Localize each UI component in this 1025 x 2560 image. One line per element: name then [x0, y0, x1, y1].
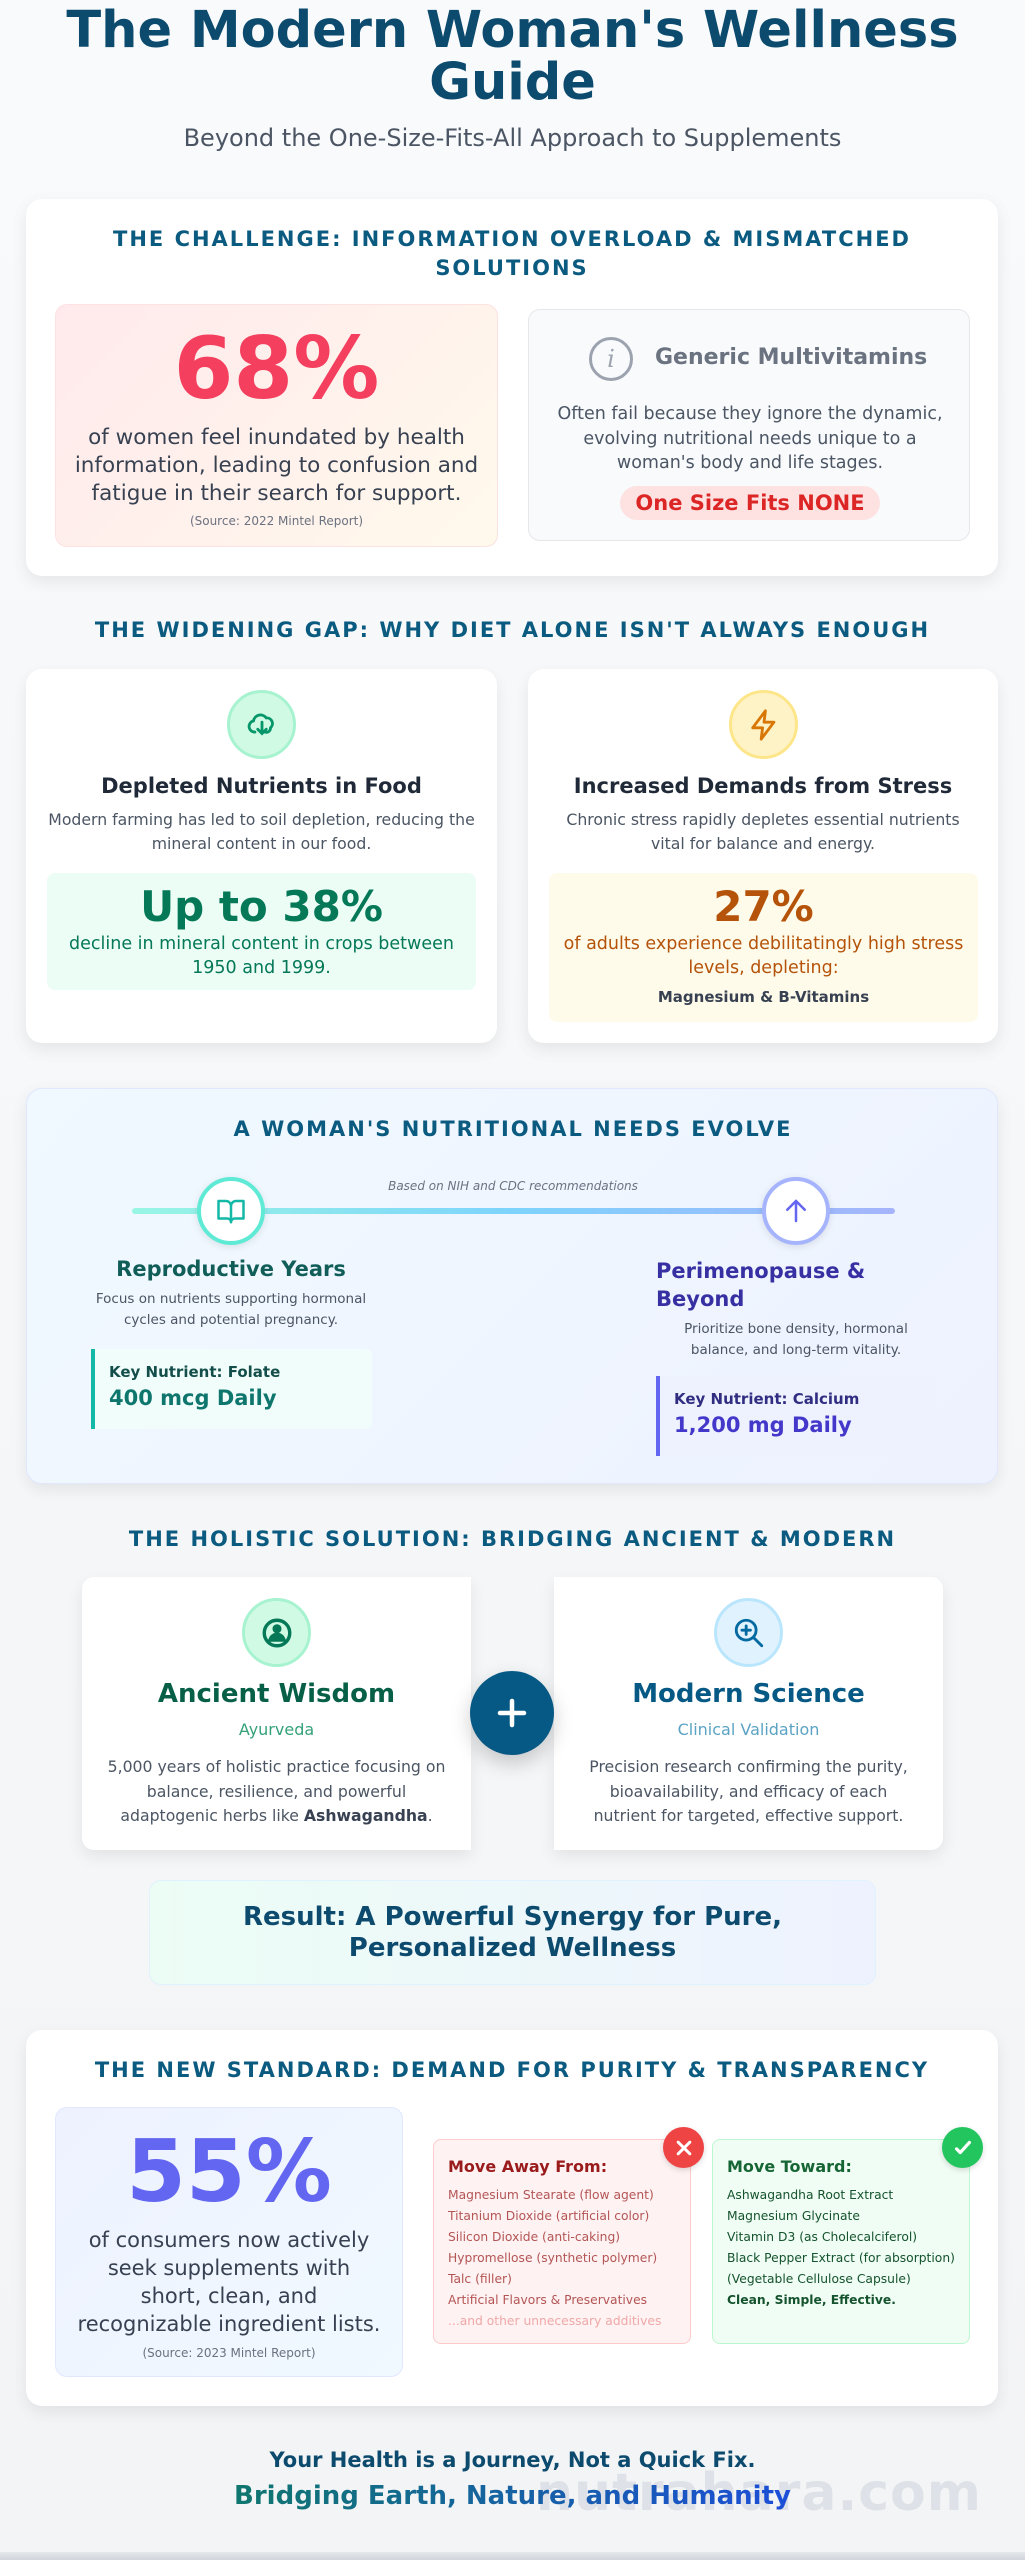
key box: folate: Key Nutrient: Folate [109, 1363, 280, 1381]
box: generic multivitamins: woman's body and life stages. [617, 453, 883, 473]
stat: 55% [55, 2107, 403, 2377]
icon: magnifier [714, 1598, 783, 1667]
stat: 55%: (Source: 2023 Mintel Report) [142, 2346, 316, 2360]
pill: one size fits none: One Size Fits NONE [635, 491, 865, 515]
stat box: 68%: 68% [174, 319, 379, 419]
panel: ancient wisdom: Ayurveda [239, 1720, 314, 1739]
title: Guide [429, 53, 596, 112]
icon: book [197, 1177, 265, 1245]
box: generic multivitamins [528, 309, 970, 541]
stage: reproductive: Focus on nutrients supporting hormonal [96, 1291, 366, 1307]
key box: folate: 400 mcg Daily [109, 1386, 277, 1410]
list: move away from: Silicon Dioxide (anti-caking) [448, 2230, 620, 2244]
stat box: 68%: information, leading to confusion and [75, 453, 478, 478]
stat: 55%: seek supplements with [108, 2256, 350, 2280]
panel: depleted nutrients [26, 669, 497, 1043]
title [66, 1, 959, 112]
stage: perimenopause: Beyond [656, 1287, 744, 1311]
stage: perimenopause: Prioritize bone density, hormonal [684, 1321, 908, 1337]
panel: ancient wisdom: Ancient Wisdom [158, 1679, 395, 1709]
panel: ancient wisdom: adaptogenic herbs like Ashwagandha. [120, 1806, 433, 1825]
watermark: nutrahara.com [536, 2463, 982, 2523]
stat: 27%: levels, depleting: [688, 958, 839, 978]
stage: perimenopause [656, 1259, 908, 1358]
list: move away from: ...and other unnecessary additives [448, 2314, 661, 2328]
panel: depleted nutrients: Modern farming has led to soil depletion, reducing the [48, 810, 475, 829]
panel: ancient wisdom: balance, resilience, and powerful [147, 1782, 406, 1800]
list: move away from: Move Away From: [448, 2157, 607, 2176]
list: move toward: Magnesium Glycinate [727, 2209, 860, 2223]
icon: soil [227, 690, 296, 759]
panel: ancient wisdom [82, 1577, 471, 1850]
panel: stress: Increased Demands from Stress [574, 774, 952, 798]
list: move away from: Titanium Dioxide (artificial color) [448, 2209, 649, 2223]
stat box: 68%: of women feel inundated by health [88, 425, 465, 450]
list: move away from: Hypromellose (synthetic polymer) [448, 2251, 657, 2265]
stage: reproductive: cycles and potential pregnancy. [124, 1312, 338, 1328]
heading: widening gap: THE WIDENING GAP: WHY DIET ALONE ISN'T ALWAYS ENOUGH [95, 618, 930, 642]
box: generic multivitamins: Often fail because they ignore the dynamic, [557, 404, 943, 424]
icon: bolt [729, 690, 798, 759]
result box: Personalized Wellness [349, 1933, 676, 1963]
panel: modern science: Precision research confirming the purity, [589, 1757, 908, 1776]
list: move toward: Black Pepper Extract (for absorption) [727, 2251, 955, 2265]
panel: needs evolve [26, 1088, 998, 1484]
list: move toward: Ashwagandha Root Extract [727, 2188, 893, 2202]
key box: calcium: Key Nutrient: Calcium [674, 1390, 859, 1408]
list: move toward: (Vegetable Cellulose Capsule) [727, 2272, 911, 2286]
heading: holistic: THE HOLISTIC SOLUTION: BRIDGING ANCIENT & MODERN [129, 1527, 896, 1551]
panel: stress: vital for balance and energy. [651, 834, 875, 853]
key box: calcium [656, 1376, 936, 1456]
panel: ancient wisdom: 5,000 years of holistic practice focusing on [108, 1757, 445, 1776]
box: generic multivitamins: evolving nutritional needs unique to a [583, 428, 917, 448]
result box: Result: A Powerful Synergy for Pure, [243, 1902, 782, 1932]
stat box: 68% [55, 304, 498, 547]
stat: 55%: recognizable ingredient lists. [78, 2312, 380, 2336]
list: move toward: Clean, Simple, Effective. [727, 2293, 896, 2307]
panel: new standard [26, 2030, 998, 2406]
stat: 27% [549, 873, 978, 1022]
pill: one size fits none [620, 486, 880, 520]
stage: reproductive [96, 1257, 366, 1328]
panel: modern science: nutrient for targeted, effective support. [594, 1806, 903, 1825]
timeline [132, 1208, 895, 1214]
panel: depleted nutrients: mineral content in our food. [152, 834, 371, 853]
title: The Modern Woman's Wellness [66, 1, 959, 60]
stat: 27%: 27% [713, 882, 814, 931]
panel: modern science [554, 1577, 943, 1850]
list: move toward [712, 2139, 970, 2344]
panel: modern science: Modern Science [632, 1679, 865, 1709]
panel: modern science: bioavailability, and efficacy of each [610, 1782, 887, 1800]
panel: new standard: THE NEW STANDARD: DEMAND FOR PURITY & TRANSPARENCY [95, 2058, 929, 2082]
stat: 55%: 55% [126, 2122, 332, 2222]
stat: 38% [47, 873, 476, 990]
footer tagline: Bridging Earth, Nature, and Humanity [234, 2481, 791, 2511]
icon: info [589, 337, 633, 381]
stage: reproductive: Reproductive Years [116, 1257, 346, 1281]
stat: 38%: decline in mineral content in crops between [69, 934, 454, 954]
list: move away from: Talc (filler) [448, 2272, 512, 2286]
icon: info: i [607, 345, 615, 373]
panel: challenge [26, 199, 998, 576]
stat: 55%: of consumers now actively [89, 2228, 369, 2252]
stat: 38%: Up to 38% [140, 882, 383, 931]
stat box: 68%: fatigue in their search for support. [92, 481, 461, 506]
stat: 27%: of adults experience debilitatingly high stress [564, 934, 963, 954]
stat: 27%: Magnesium & B-Vitamins [658, 988, 869, 1006]
box: generic multivitamins: Generic Multivitamins [655, 345, 927, 370]
stat: 38%: 1950 and 1999. [192, 958, 331, 978]
heading: challenge: THE CHALLENGE: INFORMATION OVERLOAD & MISMATCHED SOLUTIONS [113, 227, 911, 280]
stat: 55%: short, clean, and [141, 2284, 317, 2308]
key box: calcium: 1,200 mg Daily [674, 1413, 852, 1437]
icon: meditation [242, 1598, 311, 1667]
list: move toward: Move Toward: [727, 2157, 852, 2176]
panel: stress: Chronic stress rapidly depletes essential nutrients [566, 810, 960, 829]
panel: modern science: Clinical Validation [678, 1720, 819, 1739]
panel: needs evolve: Based on NIH and CDC recommendations [388, 1179, 638, 1193]
list: move toward: Vitamin D3 (as Cholecalciferol) [727, 2230, 917, 2244]
icon: plus [470, 1671, 554, 1755]
icon: arrow up [762, 1177, 830, 1245]
stat box: 68%: (Source: 2022 Mintel Report) [190, 514, 363, 528]
list: move away from [433, 2139, 691, 2344]
panel: stress [528, 669, 998, 1043]
subtitle: Beyond the One-Size-Fits-All Approach to Supplements [184, 124, 841, 152]
panel: depleted nutrients: Depleted Nutrients in Food [101, 774, 422, 798]
stage: perimenopause: Perimenopause & [656, 1259, 865, 1283]
icon: x badge [663, 2127, 704, 2168]
stage: perimenopause: balance, and long-term vitality. [691, 1342, 901, 1358]
footer text: Your Health is a Journey, Not a Quick Fix. [269, 2448, 756, 2472]
key box: folate [91, 1349, 372, 1429]
list: move away from: Artificial Flavors & Preservatives [448, 2293, 647, 2307]
panel: needs evolve: A WOMAN'S NUTRITIONAL NEEDS EVOLVE [234, 1117, 792, 1141]
result box [149, 1880, 876, 1985]
list: move away from: Magnesium Stearate (flow agent) [448, 2188, 654, 2202]
icon: check badge [942, 2127, 983, 2168]
